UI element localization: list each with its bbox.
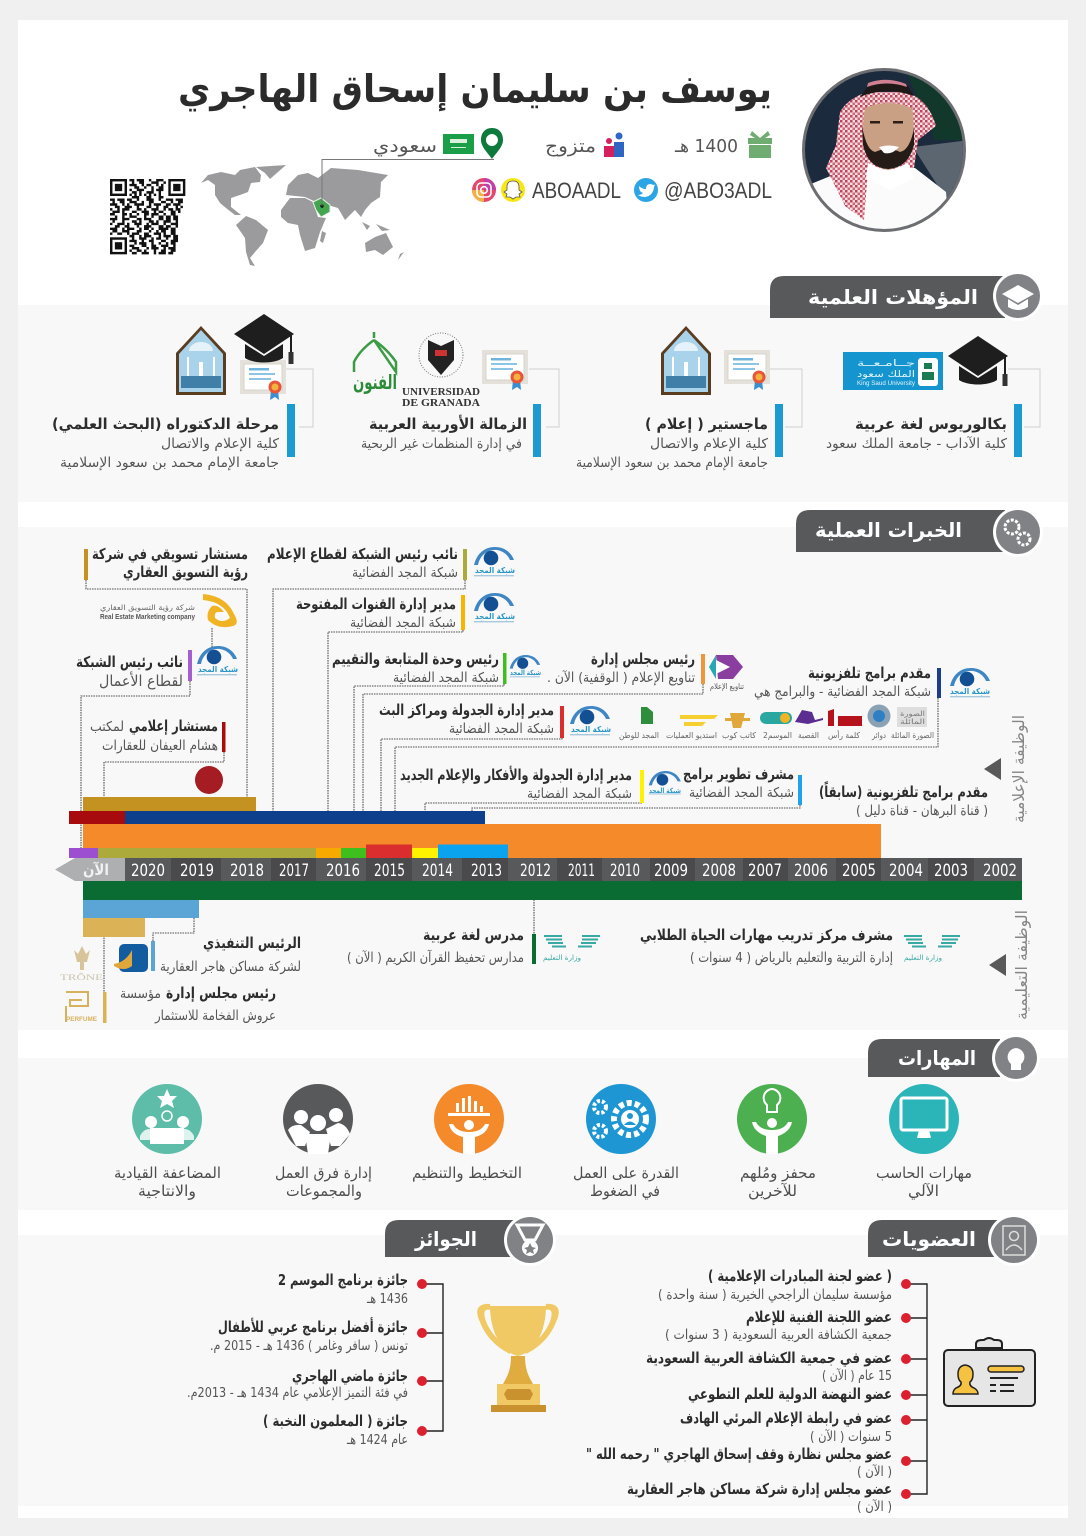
skill: computer [876,1084,972,1201]
logo: Tanaweem [709,655,744,692]
job: VP media: شبكة المجد [475,566,515,575]
icon: ID card [944,1338,1035,1406]
job: VP business: لقطاع الأعمال [99,671,183,690]
awards list: جائزة برنامج الموسم 2 [278,1271,408,1289]
logo: King Saud University [843,352,943,390]
job: follow-up unit head: شبكة المجد الفضائية [393,670,499,686]
year axis: 2012 [520,861,551,881]
qualification: European fellowship: في إدارة المنظمات غير الربحية [361,436,522,452]
skill: team management: إدارة فرق العمل [275,1164,372,1182]
Saudi Arabia highlight [313,198,330,217]
icon: certificate [482,350,528,390]
logo: University of Granada: UNIVERSIDAD [402,386,480,398]
job: Arabic teacher: مدارس تحفيظ القرآن الكريم ( الآن ) [347,949,524,966]
TV programmes logos: دوائر [871,731,886,740]
membership list [586,1267,892,1515]
job: scheduling and ideas manager: مدير إدارة الجدولة والأفكار والإعلام الجديد [400,766,632,784]
job: marketing consultant: مستشار تسويقي في شركة [92,545,248,563]
year axis: 2002 [983,861,1017,881]
accent bar [1014,404,1022,457]
job: open channels manager [296,593,515,631]
logo: Ministry of Education [544,935,600,948]
year axis: 2016 [326,861,360,881]
membership list: 5 سنوات ( الآن ) [810,1429,892,1445]
membership list: ( الآن ) [857,1464,892,1480]
skill: planning: التخطيط والتنظيم [412,1164,522,1182]
year axis: 2020 [131,861,165,881]
connector lines [79,580,938,992]
title: name: يوسف بن سليمان إسحاق الهاجري [178,67,772,112]
label: education career: الوظيفة التعليمية [1012,910,1032,1020]
accent bar [287,404,295,457]
job: programme development supervisor: مشرف تطوير برامج [683,765,794,783]
icon: Saudi flag [443,134,474,154]
qualification: doctorate [52,314,313,471]
qualification: bachelor [826,336,1040,457]
job: programme development supervisor [683,765,802,805]
job: skills centre supervisor [640,926,960,966]
logo: King Saud University: جــامـعــة [857,359,915,369]
job: former presenter: ( قناة البرهان - قناة دليل ) [856,803,988,819]
membership list: جمعية الكشافة العربية السعودية ( 3 سنوات ) [665,1327,892,1343]
heading: skills [868,1034,1040,1082]
icon: certificate [240,360,286,400]
birth date: 1400 هـ [674,136,738,157]
heading: qualifications [770,271,1043,321]
logo: Imam University [176,326,226,395]
heading: experience: الخبرات العملية [815,518,962,542]
label: media career [984,715,1029,823]
skill: motivator: محفز ومُلهم [740,1164,816,1182]
TV programmes logos: القصبة [798,731,819,740]
job: follow-up unit head: شبكة المجد [510,669,541,677]
logo: Trone: TRÔNE [60,972,103,982]
membership list: مؤسسة سليمان الراجحي الخيرية ( سنة واحدة ) [658,1287,892,1303]
logo: Ministry of Education [904,935,960,948]
panel: skills [114,1034,1040,1201]
skill: motivator [737,1084,816,1200]
year axis [55,858,1022,881]
skill: leadership: المضاعفة القيادية [114,1164,221,1182]
logo: Trone [60,946,103,982]
job: VP media [267,545,515,581]
social handles: @ABO3ADL [664,178,772,203]
qualification: bachelor: كلية الآداب - جامعة الملك سعود [826,436,1008,452]
marital status: متزوج [545,136,596,157]
panel: memberships [586,1214,1040,1515]
icon: light bulb [992,1034,1040,1082]
job: marketing consultant: رؤية التسويق العقاري [123,563,248,582]
year axis: 2009 [654,861,688,881]
heading: awards: الجوائز [414,1227,477,1251]
logo: Al Funoon [353,332,397,394]
icon: ID badge [988,1214,1040,1266]
birth date [674,131,772,158]
panel: academic qualifications [52,271,1043,471]
year axis: 2007 [748,861,782,881]
icon: trophy [477,1304,559,1412]
qualification: doctorate: جامعة الإمام محمد بن سعود الإسلامية [60,455,279,471]
portrait photo [800,65,970,240]
year axis: 2013 [471,861,502,881]
year axis: 2014 [422,861,453,881]
job: scheduling manager: شبكة المجد [571,725,611,734]
membership list: عضو النهضة الدولية للعلم التطوعي [688,1385,892,1403]
job: media consultant: لمكتب [90,719,124,735]
skill: motivator: للآخرين [748,1182,797,1200]
logo: King Saud University: King Saud University [857,381,915,387]
awards list: 1436 هـ [366,1291,408,1307]
year axis: 2015 [374,861,405,881]
logo: Rooya marketing: شركة رؤية التسويق العقاري [100,603,195,612]
marital status [545,132,624,157]
qualification: European fellowship [353,332,559,457]
qualification: European fellowship: الزمالة الأوربية العربية [369,415,527,433]
year axis: 2010 [610,861,640,881]
job: VP business: نائب رئيس الشبكة [76,653,183,671]
logo: Rooya marketing: Real Estate Marketing company [100,614,195,621]
job: former presenter: مقدم برامج تلفزيونية (سابقاً) [819,781,988,801]
job: CEO Masaken Hajer [114,934,301,975]
panel: profile header [110,65,970,266]
job: CEO Masaken Hajer: الرئيس التنفيذي [203,934,301,953]
accent bar [775,404,783,457]
year axis: 2008 [702,861,736,881]
year axis: 2005 [842,861,876,881]
job: TV presenter: شبكة المجد [950,687,990,696]
icon: certificate [724,350,770,390]
panel: work experience [55,507,1043,1024]
heading: experience [796,507,1043,557]
skill: computer: مهارات الحاسب [876,1164,972,1182]
job: open channels manager: مدير إدارة القنوات المفتوحة [296,595,456,613]
nationality [373,128,503,159]
awards list [187,1271,408,1448]
world map [201,160,494,266]
year axis: 2018 [230,861,264,881]
membership list: عضو في جمعية الكشافة العربية السعودية [646,1349,892,1367]
TV programmes logos: الصورة المائلة [891,731,934,740]
awards list: عام 1424 هـ [346,1432,408,1448]
heading: qualifications: المؤهلات العلمية [808,285,978,309]
year axis: 2006 [794,861,828,881]
year axis: 2017 [279,861,309,881]
job: scheduling manager: مدير إدارة الجدولة ومراكز البث [379,701,554,719]
bracket connector [417,1279,443,1436]
membership list: عضو مجلس إدارة شركة مساكن هاجر العقارية [627,1480,892,1498]
heading: awards [385,1214,556,1266]
logo: King Saud University: الملك سعود [857,370,915,380]
logo: Hajer [114,944,148,972]
job: Arabic teacher: مدرس لغة عربية [423,926,524,944]
logo: University of Granada: DE GRANADA [402,397,480,409]
year axis: 2003 [934,861,968,881]
job: scheduling and ideas manager: شبكة المجد [649,787,681,795]
social handles: ABOAADL [532,178,621,203]
logo: Al Funoon: الفنون [353,370,397,394]
logo: Tanaweem: تناويع الإعلام [710,682,744,692]
membership list: ( الآن ) [857,1499,892,1515]
job: VP media: نائب رئيس الشبكة لقطاع الإعلام [267,545,458,563]
job: open channels manager: شبكة المجد [475,612,515,621]
logo: Al Aifan [195,766,223,794]
logo: Imam University [661,326,711,395]
icon: instagram [472,178,496,202]
skill: team management: والمجموعات [286,1182,362,1200]
job: skills centre supervisor: وزارة التعليم [904,954,942,962]
job: VP business: شبكة المجد [198,665,238,674]
job: media consultant [90,717,226,794]
job: follow-up unit head: رئيس وحدة المتابعة والتقييم [332,650,499,668]
social handles [472,178,772,203]
job: scheduling and ideas manager: شبكة المجد الفضائية [527,786,632,802]
panel: awards [187,1214,559,1448]
skill: team management [275,1084,372,1200]
job: follow-up unit head [332,650,541,686]
QR code [110,180,184,253]
job: VP media: شبكة المجد الفضائية [352,565,458,581]
job: board chair Orosh: PERFUME [66,1017,97,1023]
heading: memberships: العضويات [882,1227,976,1251]
job: scheduling manager [379,701,611,738]
skill: leadership [114,1084,221,1200]
heading: memberships [868,1214,1040,1266]
job: Arabic teacher: وزارة التعليم [543,954,581,962]
awards list: تونس ( سافر وغامر ) 1436 هـ - 2015 م. [210,1338,408,1354]
qualification: bachelor: بكالوريوس لغة عربية [855,415,1007,433]
awards list: في فئة التميز الإعلامي عام 1434 هـ - 2013م. [187,1385,408,1401]
timeline bars [69,797,1022,937]
qualification: doctorate: مرحلة الدكتوراه (البحث العلمي) [52,415,279,433]
job: CEO Masaken Hajer: لشركة مساكن هاجر العقارية [160,959,301,975]
awards list: جائزة ماضي الهاجري [292,1367,408,1386]
job: Arabic teacher [347,926,600,966]
job: scheduling manager: شبكة المجد الفضائية [449,721,554,737]
year axis: 2011 [568,861,595,881]
TV programmes logos: استديو العمليات [666,731,717,740]
icon: twitter [634,178,658,202]
icon: gears [993,507,1043,557]
job: board chair Orosh: رئيس مجلس إدارة [166,984,276,1002]
job: scheduling and ideas manager [400,766,681,803]
skill: working under pressure: القدرة على العمل [573,1164,679,1182]
year axis: 2019 [180,861,214,881]
membership list: عضو مجلس نظارة وقف إسحاق الهاجري " رحمه الله " [586,1445,892,1464]
logo: Rooya marketing [100,594,237,627]
bracket connector [901,1279,927,1499]
job: TV presenter: شبكة المجد الفضائية - والبرامج هي [754,684,931,700]
qualification: master: كلية الإعلام والاتصال [650,436,769,452]
TV programmes logos: الصورة [900,710,925,718]
TV programmes logos [619,704,934,740]
job: TV presenter: مقدم برامج تلفزيونية [808,664,931,682]
qualification: master: جامعة الإمام محمد بن سعود الإسلامية [576,455,768,471]
membership list: 15 عام ( الآن ) [822,1368,892,1384]
job: skills centre supervisor: إدارة التربية والتعليم بالرياض ( 4 سنوات ) [690,950,893,966]
membership list: ( عضو لجنة المبادرات الإعلامية ) [708,1267,892,1285]
job: media consultant: مستشار إعلامي [129,717,218,735]
job: open channels manager: شبكة المجد الفضائية [350,615,456,631]
heading: skills: المهارات [898,1046,976,1070]
nationality: سعودي [373,136,437,157]
job: programme development supervisor: شبكة المجد الفضائية [689,785,794,801]
membership list: عضو في رابطة الإعلام المرئي الهادف [680,1409,892,1427]
TV programmes logos: المائلة [900,718,925,726]
year axis: 2004 [889,861,923,881]
icon: cap [948,336,1008,386]
job: VP business [76,646,238,690]
membership list: عضو اللجنة الفنية للإعلام [746,1308,892,1326]
qualification: master [576,326,802,471]
job: TV presenter [754,664,990,700]
job: board chair Orosh: عروش الفخامة للاستثمار [154,1008,276,1024]
label: education career [989,910,1032,1020]
job: Tanaweem board chair [547,650,744,692]
job: board chair Orosh [60,946,276,1024]
accent bar [533,404,541,457]
awards list: جائزة أفضل برنامج عربي للأطفال [218,1317,408,1336]
job: skills centre supervisor: مشرف مركز تدريب مهارات الحياة الطلابي [640,926,893,944]
qualification: doctorate: كلية الإعلام والاتصال [161,436,280,452]
skill: working under pressure [573,1084,679,1201]
job: media consultant: هشام العيفان للعقارات [102,738,218,754]
job: board chair Orosh: مؤسسة [120,986,161,1002]
awards list: جائزة ( المعلمون النخبة ) [263,1412,408,1430]
job: Tanaweem board chair: رئيس مجلس إدارة [591,650,695,668]
icon: couple [604,132,624,157]
qualification: master: ماجستير ( إعلام ) [645,415,768,433]
skill: computer: الآلي [908,1182,939,1201]
skill: leadership: والانتاجية [138,1182,196,1200]
skill: planning [412,1084,522,1182]
icon: snapchat [501,178,525,202]
job: Tanaweem board chair: تناويع الإعلام ( الوقفية) الآن . [547,670,695,686]
year axis: الآن [83,861,109,879]
logo: University of Granada [402,333,480,409]
icon: medal [504,1214,556,1266]
icon: cap [234,314,294,364]
skill: working under pressure: في الضغوط [590,1182,660,1201]
TV programmes logos: الموسم2 [763,731,792,740]
label: media career: الوظيفة الإعلامية [1009,715,1029,823]
job: marketing consultant [84,545,248,582]
icon: graduation cap [993,271,1043,321]
logo: Perfume Station [66,992,88,1022]
job: former presenter [819,781,988,819]
icon: location pin [481,128,503,159]
TV programmes logos: المجد للوطن [619,731,659,740]
TV programmes logos: كلمة رأس [828,730,860,740]
icon: gift [748,131,772,158]
TV programmes logos: كاتب كوب [722,731,756,740]
